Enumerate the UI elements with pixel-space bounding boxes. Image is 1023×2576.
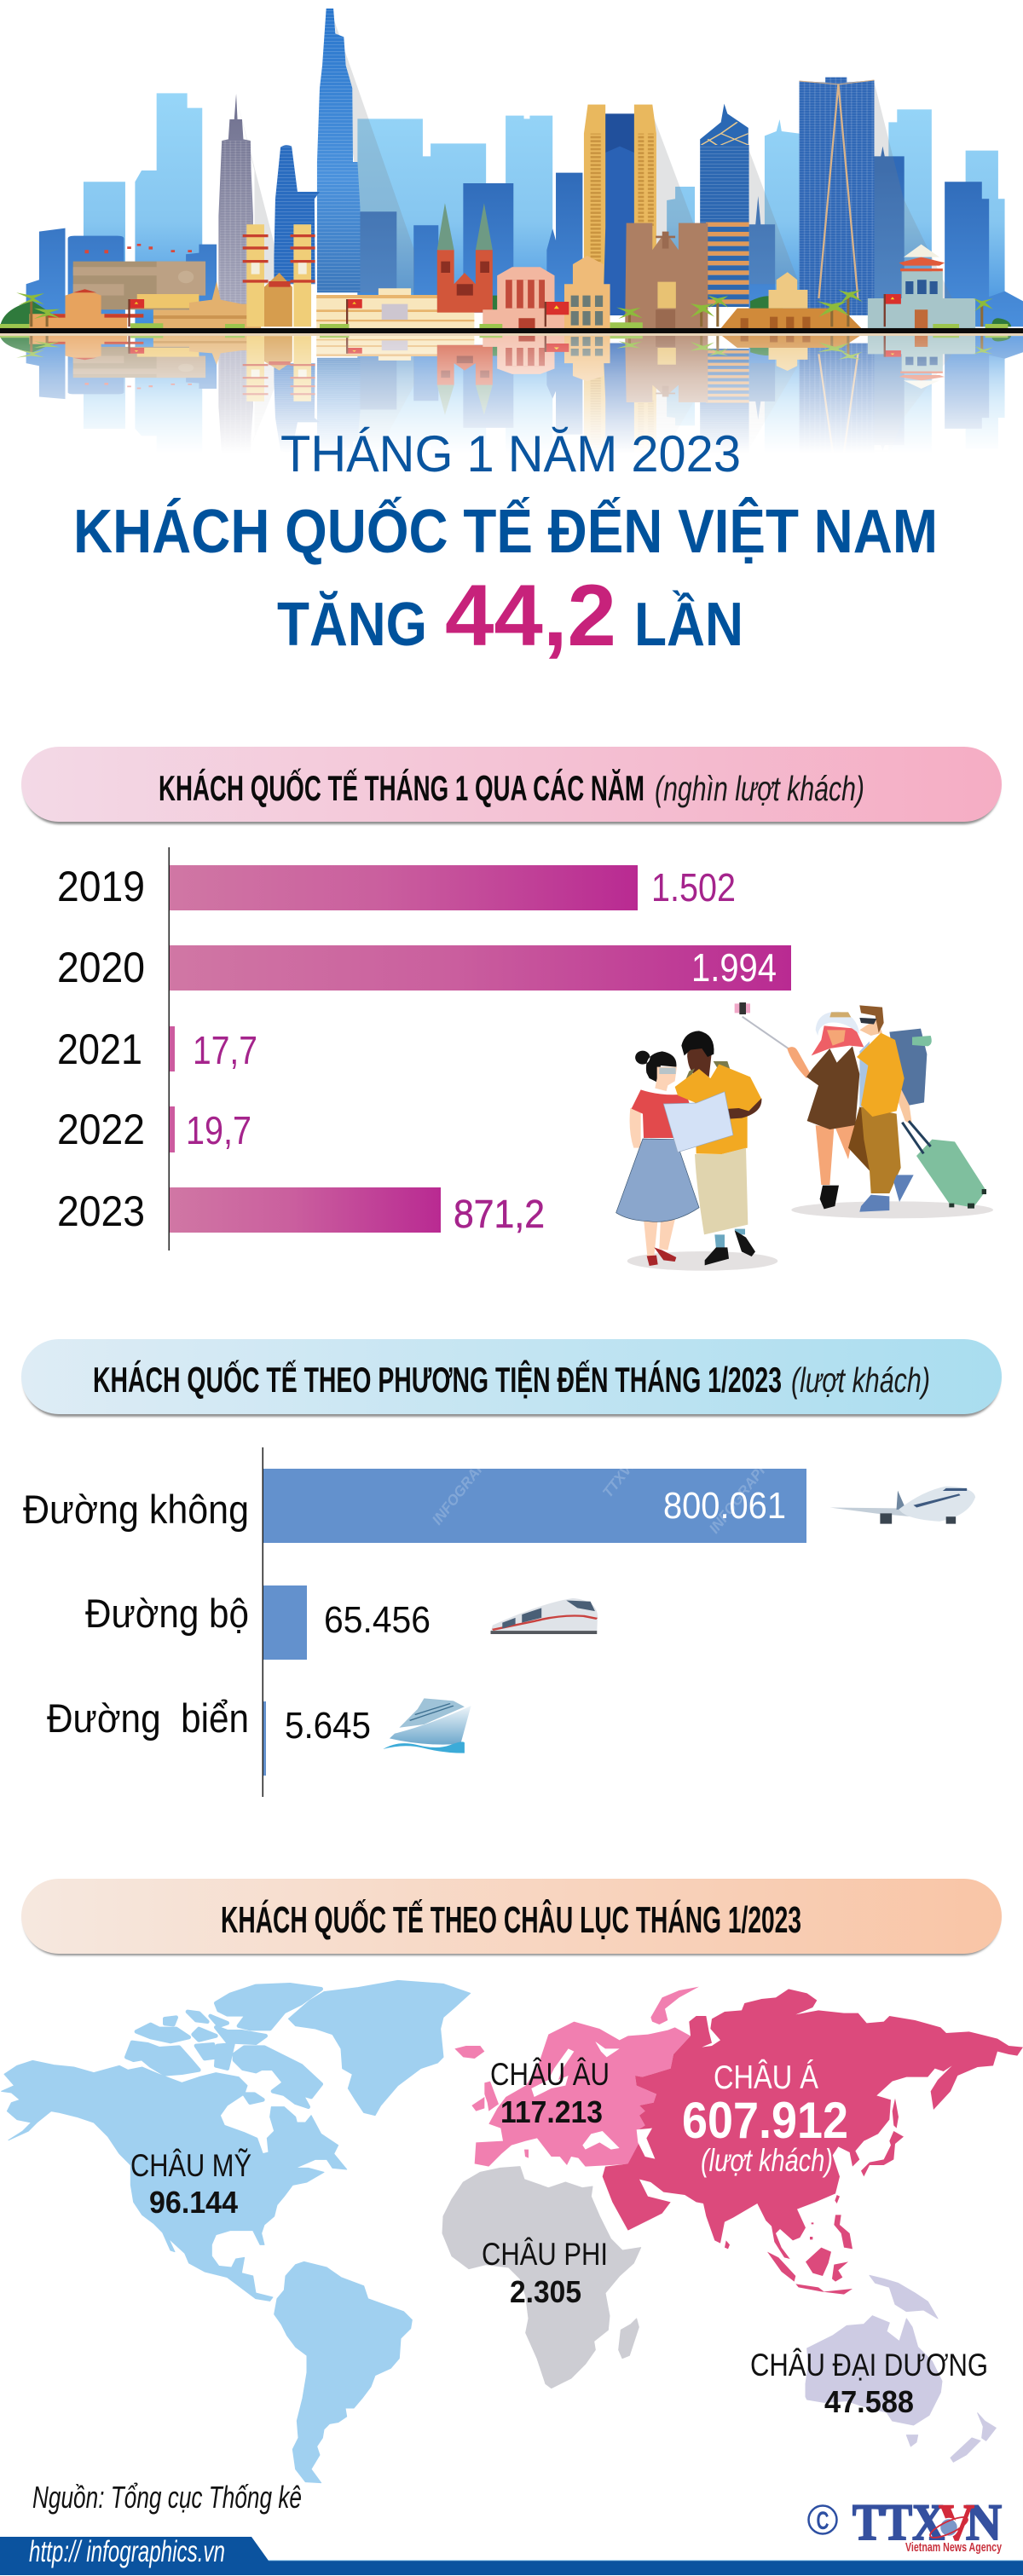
panel: yearly arrivals heading: KHÁCH QUỐC TẾ THÁNG 1 QUA CÁC NĂM bbox=[159, 767, 644, 808]
bar: sea: 5.645 bbox=[285, 1705, 371, 1747]
flags over brown building bbox=[84, 244, 192, 253]
tall blue tower bbox=[799, 78, 875, 315]
diamond top tower bbox=[700, 104, 748, 145]
label: Europe bbox=[490, 2057, 610, 2129]
reflection tint bbox=[0, 333, 1023, 336]
turtle pagoda bbox=[721, 309, 861, 328]
bar 2019: 2019 bbox=[57, 863, 145, 910]
footer band: http:// infographics.vn bbox=[29, 2535, 225, 2568]
copyright mark bbox=[808, 2506, 837, 2535]
illustration: tourists bbox=[616, 1002, 993, 1271]
label: Americas: CHÂU MỸ bbox=[130, 2148, 251, 2183]
gold twin tower bbox=[604, 113, 636, 315]
ground line bbox=[0, 328, 1023, 333]
region: Americas bbox=[2, 1980, 471, 2483]
mausoleum bbox=[483, 267, 568, 328]
copyright mark: C bbox=[817, 2507, 829, 2535]
footer band bbox=[0, 2535, 1023, 2575]
South America bbox=[275, 2261, 412, 2483]
title line 2: KHÁCH QUỐC TẾ ĐẾN VIỆT NAM bbox=[73, 496, 938, 566]
seas bbox=[531, 2042, 620, 2150]
chart: world map bbox=[2, 1980, 1023, 2483]
bar 2022: 2022 bbox=[57, 1106, 145, 1153]
palace bbox=[316, 288, 474, 328]
bar 2019: 1.502 bbox=[651, 865, 736, 910]
yellow colonial building bbox=[564, 256, 610, 328]
panel: continents heading bbox=[21, 1879, 1002, 1955]
bar 2020: 1.994 bbox=[691, 945, 777, 990]
label: Americas: 96.144 bbox=[149, 2185, 238, 2220]
Vietnamese flags bbox=[129, 294, 901, 315]
region: Europe bbox=[471, 1987, 699, 2167]
title line 3: 44,2 bbox=[445, 567, 616, 664]
bar 2023: 2023 bbox=[57, 1187, 145, 1235]
bar 2023: 871,2 bbox=[454, 1192, 545, 1236]
watermarks on bar: INFOGRAPHICS bbox=[429, 1430, 511, 1528]
bar chart: arrivals by year bbox=[57, 847, 791, 1250]
watermarks on bar bbox=[429, 1430, 788, 1536]
grey tower bbox=[218, 94, 253, 305]
green gate bbox=[868, 271, 975, 328]
label: Asia: 607.912 bbox=[682, 2092, 848, 2149]
brown cathedral bbox=[625, 223, 708, 328]
post office bbox=[29, 289, 127, 328]
bar: road: 65.456 bbox=[324, 1599, 431, 1641]
label: Oceania bbox=[750, 2348, 988, 2419]
label: Africa bbox=[482, 2237, 608, 2309]
label: Oceania: 47.588 bbox=[824, 2384, 914, 2419]
bar: air: Đường không bbox=[23, 1487, 249, 1532]
bar: road: Đường bộ bbox=[85, 1591, 249, 1636]
title bbox=[73, 425, 938, 664]
bar 2022 bbox=[57, 1106, 251, 1153]
label: Asia: (lượt khách) bbox=[701, 2143, 833, 2178]
watermarks on bar: TTXVN bbox=[599, 1453, 642, 1500]
logo: TTXVN bbox=[808, 2494, 1002, 2555]
panel: transport heading: (lượt khách) bbox=[791, 1360, 930, 1400]
source note: Nguồn: Tổng cục Thống kê bbox=[32, 2480, 302, 2515]
label: Europe: 117.213 bbox=[500, 2094, 603, 2129]
city hall bbox=[153, 281, 261, 328]
region: Oceania bbox=[806, 2275, 996, 2462]
bar 2019 bbox=[57, 863, 736, 910]
Bitexco tower bbox=[274, 145, 320, 284]
region: Asia bbox=[603, 1989, 1023, 2295]
Asian islands bbox=[725, 2099, 904, 2295]
title line 3: LẦN bbox=[634, 590, 743, 659]
bar: air bbox=[23, 1469, 806, 1543]
landmark tower bbox=[317, 9, 360, 292]
bar 2020 bbox=[57, 944, 791, 991]
icon: airplane bbox=[829, 1487, 975, 1524]
label: Africa: CHÂU PHI bbox=[482, 2237, 608, 2272]
trees bbox=[0, 296, 1011, 326]
title line 1: THÁNG 1 NĂM 2023 bbox=[280, 425, 741, 482]
brown building bbox=[73, 262, 205, 309]
Cao Dai towers bbox=[246, 224, 311, 326]
region: Africa bbox=[442, 2167, 641, 2388]
bar 2022: 19,7 bbox=[186, 1108, 251, 1152]
bar: air: 800.061 bbox=[663, 1485, 786, 1527]
background light blue towers bbox=[84, 93, 1005, 326]
title line 3: TĂNG bbox=[277, 591, 427, 659]
background dark blue towers bbox=[26, 147, 1023, 326]
logo: TTXVN: TTX bbox=[852, 2494, 945, 2550]
bar 2021 bbox=[57, 1025, 257, 1073]
shadows on the towers bbox=[237, 20, 959, 313]
label: Asia: CHÂU Á bbox=[714, 2059, 818, 2096]
logo: TTXVN: N bbox=[966, 2494, 1002, 2550]
couple with map bbox=[616, 1031, 777, 1271]
label: Americas bbox=[130, 2148, 251, 2220]
couple with selfie stick bbox=[735, 1002, 993, 1218]
panel: yearly arrivals heading bbox=[21, 747, 1002, 824]
palms bbox=[32, 296, 982, 326]
Caspian sea bbox=[637, 2128, 655, 2159]
bar: road bbox=[85, 1585, 431, 1660]
icon: cruise ship bbox=[383, 1698, 471, 1753]
Greenland bbox=[288, 1980, 471, 2116]
chart axis bbox=[169, 847, 170, 1250]
label: Asia bbox=[682, 2059, 848, 2178]
bar 2021: 2021 bbox=[57, 1025, 142, 1073]
label: Africa: 2.305 bbox=[510, 2274, 581, 2309]
logo: TTXVN: V bbox=[939, 2494, 974, 2550]
region: Iceland bbox=[454, 2046, 484, 2059]
bar: sea bbox=[47, 1695, 371, 1776]
bar: sea: Đường biển bbox=[47, 1695, 249, 1741]
panel: transport heading bbox=[21, 1339, 1002, 1417]
watermarks on bar: INFOGRAPHICS bbox=[706, 1439, 788, 1536]
bar 2020: 2020 bbox=[57, 944, 145, 991]
North America bbox=[2, 1980, 471, 2301]
panel: yearly arrivals heading: (nghìn lượt khách) bbox=[655, 769, 864, 808]
illustration: city skyline bbox=[0, 9, 1023, 333]
bar chart: arrivals by transport bbox=[23, 1430, 806, 1797]
title line 3 bbox=[277, 567, 743, 664]
cathedral bbox=[437, 203, 493, 250]
bar 2021: 17,7 bbox=[193, 1028, 257, 1072]
shrubs bbox=[0, 322, 1008, 328]
label: Europe: CHÂU ÂU bbox=[490, 2057, 610, 2092]
bar 2023 bbox=[57, 1187, 545, 1236]
icon: train bbox=[491, 1598, 598, 1634]
illustration: skyline reflection bbox=[0, 332, 1023, 446]
